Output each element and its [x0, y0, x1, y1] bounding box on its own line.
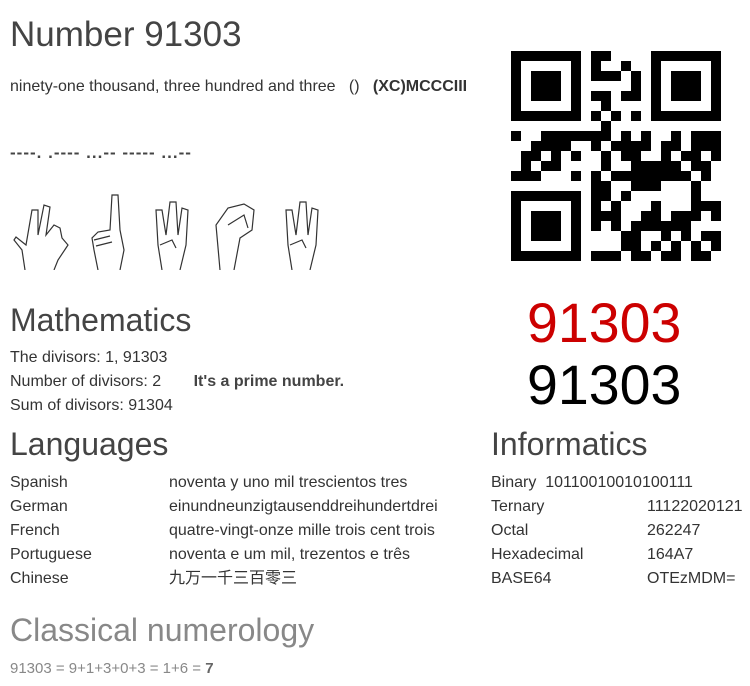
heading: Languages: Languages: [10, 426, 168, 462]
table: informatics: Binary 10110010010100111: [491, 474, 693, 491]
text: numerology formula: 91303 = 9+1+3+0+3 = 1+6 = 7: [10, 660, 214, 677]
text block: divisors: Number of divisors: 2 It's a prime number.: [10, 373, 344, 390]
QR code: [511, 51, 721, 261]
table: informatics: [491, 474, 743, 587]
table: languages: French: [10, 522, 60, 539]
table: informatics: 262247: [647, 522, 700, 539]
table: informatics: 11122020121: [647, 498, 743, 515]
table: informatics: BASE64: [491, 570, 551, 587]
table: languages: einundneunzigtausenddreihundertdrei: [169, 498, 438, 515]
table: languages: noventa e um mil, trezentos e três: [169, 546, 410, 563]
table: informatics: Hexadecimal: [491, 546, 583, 563]
table: languages: Chinese: [10, 570, 69, 587]
table: informatics: OTEzMDM=: [647, 570, 735, 587]
text block: divisors: Sum of divisors: 91304: [10, 397, 173, 414]
text: morse code: ----. .---- ...-- ----- ...--: [10, 143, 192, 162]
table: languages: Portuguese: [10, 546, 92, 563]
table: languages: quatre-vingt-onze mille trois cent trois: [169, 522, 435, 539]
title: Number 91303: [10, 15, 242, 54]
table: languages: [10, 474, 438, 587]
table: informatics: Ternary: [491, 498, 544, 515]
big number black: 91303: [527, 354, 681, 416]
icon: sign language hands: [13, 194, 319, 270]
text block: divisors: [10, 349, 344, 414]
text: number in words and roman numeral: ninety-one thousand, three hundred and three () (XC)MCCCIII: [10, 78, 467, 95]
table: languages: German: [10, 498, 68, 515]
table: languages: 九万一千三百零三: [169, 570, 297, 587]
text block: divisors: The divisors: 1, 91303: [10, 349, 167, 366]
big number red: 91303: [527, 292, 681, 354]
table: languages: Spanish: [10, 474, 68, 491]
heading: Informatics: Informatics: [491, 426, 647, 462]
heading: Classical numerology: Classical numerology: [10, 612, 314, 648]
table: informatics: Octal: [491, 522, 528, 539]
table: languages: noventa y uno mil trescientos tres: [169, 474, 407, 491]
heading: Mathematics: Mathematics: [10, 302, 191, 338]
table: informatics: 164A7: [647, 546, 693, 563]
